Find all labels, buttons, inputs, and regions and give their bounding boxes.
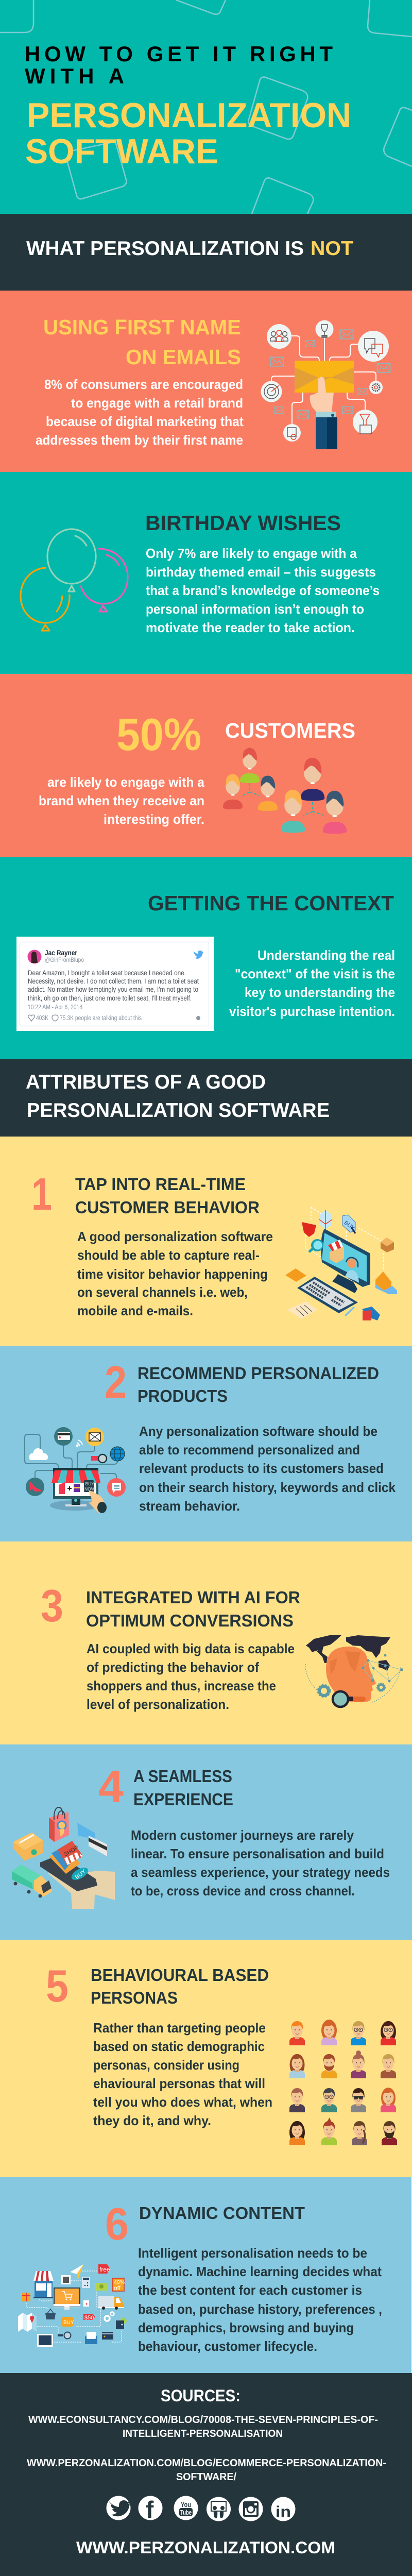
text: understanding context: visitor's purchase intention. [229, 1004, 395, 1019]
text: first name statistic: because of digital marketing that [46, 414, 244, 429]
icon: gift [22, 2293, 30, 2301]
heading: tap into real-time customer behavior [75, 1175, 260, 1217]
icon: basket [302, 1222, 316, 1237]
icon: wallet [285, 1268, 306, 1282]
icon: map [18, 2313, 37, 2332]
icon: customer network [223, 748, 347, 834]
text: recommendations: Any personalization software should be [139, 1423, 377, 1439]
text: birthday statistic: that a brand’s knowledge of someone’s [146, 583, 380, 598]
text: intelligent personalisation: the best content for each customer is [138, 2282, 362, 2298]
icon: pointing hand [89, 1490, 107, 1514]
icon: wifi [76, 1440, 82, 1447]
heading: tap into real-time customer behavior: TAP INTO REAL-TIME [75, 1175, 246, 1194]
heading: dynamic content: DYNAMIC CONTENT [139, 2204, 305, 2223]
heading: behavioural based personas: PERSONAS [91, 1989, 178, 2008]
number: 6: 6 [105, 2198, 129, 2249]
heading: integrated with AI: OPTIMUM CONVERSIONS [86, 1612, 294, 1631]
screenshot: tweet card: 75.3K people are talking about this [60, 1014, 142, 1022]
heading: using first name: ON EMAILS [126, 345, 241, 369]
heading: recommend personalized products [138, 1364, 379, 1406]
icon: twitter [106, 2496, 131, 2520]
icon: facebook [138, 2496, 163, 2523]
heading: what personalization is not: WHAT PERSONALIZATION IS [26, 238, 304, 260]
icon: buy button: BUY [343, 1220, 356, 1232]
screenshot: tweet card: 10:22 AM - Apr 6, 2018 [28, 1003, 82, 1011]
icon: buy button [342, 1215, 356, 1233]
text: source links [27, 2414, 386, 2483]
title: personalization software: SOFTWARE [25, 132, 218, 171]
text: first name statistic: to engage with a retail brand [71, 395, 243, 411]
panel: using first name on emails [0, 291, 412, 472]
icon: pen [345, 1307, 354, 1316]
icon: free tag [98, 2264, 110, 2274]
icon: youtube [174, 2496, 198, 2520]
text: recommendations: able to recommend personalized and [139, 1442, 360, 1458]
icon: parcel [381, 1238, 394, 1252]
text: behavioural personas: they do it, and why. [93, 2113, 211, 2128]
text: intelligent personalisation: demographics, browsing and buying [138, 2320, 354, 2335]
icon: buy button: BUY [74, 1868, 88, 1880]
heading: attributes of a good personalization software: PERSONALIZATION SOFTWARE [27, 1099, 330, 1122]
panel: attribute 5 behavioural personas [0, 1940, 412, 2177]
heading: using first name: USING FIRST NAME [43, 315, 241, 339]
heading: getting the context: GETTING THE CONTEXT [148, 891, 394, 915]
icon: magnifier [91, 1454, 107, 1463]
button: buy now [84, 1480, 95, 1492]
text: customer journeys [131, 1827, 390, 1899]
text: understanding context: "context" of the visit is the [235, 966, 395, 981]
heading: behavioural based personas [91, 1966, 269, 2008]
icon: wallet [116, 2317, 127, 2329]
text: behavioural personas [93, 2020, 272, 2128]
icon: truck [375, 1272, 397, 1294]
icon: paper plane [70, 2264, 83, 2279]
text: recommendations [139, 1423, 396, 1514]
icon: buy tag: BUY [63, 2320, 74, 2326]
icon: 40% off: 40% [114, 2279, 125, 2285]
panel: birthday wishes [0, 472, 412, 674]
text: interesting offer: brand when they receive an [39, 793, 204, 808]
icon: balloons [21, 529, 128, 631]
heading: tap into real-time customer behavior: CUSTOMER BEHAVIOR [75, 1198, 260, 1217]
panel: attribute 6 dynamic content [0, 2177, 412, 2373]
icon: free tag: free [99, 2266, 110, 2273]
text: AI and big data: AI coupled with big data is capable [87, 1641, 295, 1656]
icon: credit card [102, 2332, 113, 2340]
text: customer journeys: Modern customer journeys are rarely [131, 1827, 354, 1843]
icon: calculator [82, 2277, 90, 2288]
icon: note [287, 1301, 317, 1319]
button: buy now: BUY [85, 1481, 94, 1486]
panel: getting the context [0, 857, 412, 1059]
text: tweet body: Dear Amazon, I bought a toilet seat because I needed one. [28, 969, 186, 977]
text: real-time behavior: time visitor behavior happening [77, 1266, 268, 1282]
icon: heart and reply [28, 1015, 58, 1021]
panel: title header [0, 0, 412, 214]
text: intelligent personalisation: behaviour, customer lifecycle. [138, 2338, 317, 2354]
text: first name statistic [36, 377, 244, 448]
heading: integrated with AI: INTEGRATED WITH AI FOR [86, 1588, 300, 1607]
heading: a seamless experience: A SEAMLESS [133, 1767, 232, 1786]
panel: 50% customers [0, 674, 412, 857]
text: first name statistic: 8% of consumers are encouraged [44, 377, 243, 392]
heading: a seamless experience: EXPERIENCE [133, 1790, 233, 1809]
text: behavioural personas: personas, consider using [93, 2057, 239, 2073]
icon: facebook: f [146, 2496, 154, 2523]
text: intelligent personalisation: based on, purchase history, preferences , [138, 2301, 382, 2317]
icon: mail bubble [85, 1428, 104, 1446]
text: website: WWW.PERZONALIZATION.COM [76, 2538, 335, 2557]
text: birthday statistic: motivate the reader to take action. [146, 620, 355, 635]
text: real-time behavior: mobile and e-mails. [77, 1303, 193, 1318]
text: understanding context: key to understanding the [245, 985, 395, 1000]
text: behavioural personas: Rather than targeting people [93, 2020, 266, 2036]
screenshot: tweet card: 403K [36, 1014, 48, 1022]
text: tweet body: addict. No matter how temptingly you email me, I'm not going to [28, 986, 198, 993]
text: source links: WWW.ECONSULTANCY.COM/BLOG/70008-THE-SEVEN-PRINCIPLES-OF- [28, 2414, 378, 2426]
icon: box [13, 1833, 43, 1861]
panel: attribute 3 integrated with AI [0, 1541, 412, 1744]
text: intelligent personalisation: Intelligent personalisation needs to be [138, 2245, 367, 2261]
heading: sources: SOURCES: [161, 2386, 241, 2405]
icon: gears [105, 2312, 114, 2321]
text: real-time behavior [77, 1229, 273, 1318]
number: 3: 3 [41, 1580, 63, 1631]
panel: footer sources [0, 2373, 412, 2576]
icon: delivery truck [12, 1865, 52, 1898]
icon: basket [45, 2309, 56, 2319]
icon: buy button [70, 1865, 90, 1883]
icon: hand [47, 1871, 115, 1909]
icon: e-commerce flow illustration [18, 2264, 127, 2347]
icon: 40% off [112, 2278, 125, 2292]
icon: avatar [28, 950, 41, 963]
icon: $50 tag: $50 [84, 2315, 94, 2321]
icon: mobile shopping illustration [12, 1807, 115, 1909]
icon: persona avatar grid [289, 2020, 397, 2145]
icon: magnifier [58, 2332, 71, 2339]
icon: 40% off: off [114, 2284, 121, 2292]
icon: chat bubble [107, 1478, 126, 1497]
text: birthday statistic: Only 7% are likely to engage with a [146, 546, 357, 561]
title: personalization software [25, 96, 351, 171]
heading: behavioural based personas: BEHAVIOURAL BASED [91, 1966, 269, 1985]
title: personalization software: PERSONALIZATION [27, 96, 351, 135]
icon: phone shop [49, 1841, 83, 1874]
text: first name statistic: addresses them by their first name [36, 432, 243, 448]
heading: integrated with AI [86, 1588, 300, 1631]
icon: buy tag [61, 2317, 74, 2327]
screenshot: tweet card: @GirlFromBlupo [45, 956, 84, 963]
number: 1: 1 [31, 1168, 52, 1219]
icon: $50 tag [83, 2314, 95, 2321]
icon: instagram [239, 2497, 263, 2521]
icon: shopping bag [49, 1807, 69, 1842]
icon: globe [110, 1447, 125, 1461]
text: real-time behavior: should be able to capture real- [77, 1247, 260, 1263]
panel: what personalization is not [0, 214, 412, 291]
stat: 50%: 50% [116, 709, 201, 760]
screenshot: tweet card [16, 937, 214, 1031]
icon: mug [83, 2300, 89, 2307]
icon: shoe bubble [26, 1478, 44, 1496]
number: 2: 2 [105, 1357, 127, 1408]
text: interesting offer [39, 774, 204, 827]
text: intelligent personalisation: dynamic. Machine learning decides what [138, 2264, 382, 2279]
heading: recommend personalized products: RECOMMEND PERSONALIZED [138, 1364, 379, 1383]
title: how to get it right: HOW TO GET IT RIGHT [25, 42, 333, 66]
text: behavioural personas: based on static demographic [93, 2039, 265, 2054]
text: tweet body [28, 969, 199, 1002]
text: real-time behavior: on several channels i.e. web, [77, 1284, 248, 1300]
text: understanding context: Understanding the real [258, 947, 395, 963]
icon: open mail [85, 2332, 97, 2344]
text: customer journeys: to be, cross device and cross channel. [131, 1883, 355, 1899]
icon: delivery truck [98, 2296, 124, 2310]
icon: linkedin [271, 2497, 296, 2521]
button: buy now: NOW [84, 1486, 95, 1492]
text: customer journeys: linear. To ensure personalisation and build [131, 1846, 384, 1861]
text: AI and big data: shoppers and thus, increase the [87, 1678, 276, 1693]
text: AI and big data: of predicting the behavior of [87, 1659, 259, 1675]
text: source links: INTELLIGENT-PERSONALISATION [123, 2428, 283, 2439]
icon: cash [95, 2283, 108, 2291]
heading: using first name [43, 315, 241, 369]
icon: AI head with world map [305, 1635, 403, 1707]
heading: attributes of a good personalization software: ATTRIBUTES OF A GOOD [26, 1071, 266, 1093]
text: tweet body: think, oh go on then, just one more toilet seat, I'll treat myself. [28, 994, 192, 1002]
icon: gift [319, 1210, 332, 1229]
number: 5: 5 [46, 1960, 68, 2011]
heading: a seamless experience [133, 1767, 233, 1809]
icon: phone [40, 1855, 97, 1891]
screenshot: tweet card: Jac Rayner [45, 949, 78, 957]
panel: attribute 4 seamless experience [0, 1744, 412, 1940]
text: birthday statistic: birthday themed email – this suggests [146, 564, 376, 580]
text: intelligent personalisation [138, 2245, 382, 2354]
icon: credit card [362, 1307, 380, 1320]
icon: phone shop: SHOP [63, 1844, 80, 1858]
text: AI and big data [87, 1641, 295, 1712]
text: source links: WWW.PERZONALIZATION.COM/BLOG/ECOMMERCE-PERSONALIZATION- [27, 2458, 386, 2469]
icon: isometric computer store [285, 1207, 397, 1320]
number: 4: 4 [98, 1761, 124, 1812]
icon: online store hub [25, 1427, 126, 1514]
panel: attribute 1 real-time behavior [0, 1137, 412, 1346]
text: understanding context [229, 947, 395, 1019]
icon: monitor with cart [54, 2287, 80, 2310]
text: recommendations: relevant products to its customers based [139, 1461, 384, 1476]
text: recommendations: on their search history, keywords and click [139, 1480, 396, 1495]
icon: barcode [61, 2275, 71, 2284]
title: how to get it right: WITH A [25, 64, 124, 88]
heading: what personalization is not: NOT [311, 238, 353, 260]
title: how to get it right [25, 42, 333, 88]
heading: birthday wishes: BIRTHDAY WISHES [145, 511, 341, 535]
panel: attribute 2 recommend products [0, 1346, 412, 1541]
icon: cloud [29, 1448, 48, 1460]
text: AI and big data: level of personalization. [87, 1697, 229, 1712]
icon: store [33, 2271, 54, 2298]
text: interesting offer: are likely to engage with a [47, 774, 204, 790]
heading: recommend personalized products: PRODUCTS [138, 1387, 228, 1406]
text: customer journeys: a seamless experience, your strategy needs [131, 1865, 390, 1880]
text: birthday statistic: personal information isn’t enough to [146, 601, 364, 617]
text: recommendations: stream behavior. [139, 1498, 240, 1514]
text: behavioural personas: ehavioural personas that will [93, 2076, 265, 2091]
heading: customers: CUSTOMERS [225, 719, 355, 742]
icon: email hub illustration [261, 320, 390, 449]
icon: twitter bird [194, 951, 203, 959]
icon: card bubble [54, 1427, 73, 1446]
text: source links: SOFTWARE/ [176, 2471, 236, 2483]
icon: slideshare [207, 2497, 231, 2521]
text: birthday statistic [146, 546, 380, 635]
icon: linkedin: in [276, 2503, 291, 2520]
panel: attributes heading [0, 1059, 412, 1137]
text: behavioural personas: tell you who does what, when [93, 2094, 272, 2110]
text: tweet body: Necessity, not desire. I do not collect them. I am not a toilet seat [28, 977, 199, 985]
text: interesting offer: interesting offer. [104, 811, 204, 827]
icon: youtube: Tube [180, 2509, 192, 2516]
icon: youtube: You [181, 2500, 191, 2509]
heading: attributes of a good personalization software [26, 1071, 330, 1122]
icon: tablet [37, 2334, 53, 2347]
icon: credit cards [77, 1823, 107, 1856]
text: real-time behavior: A good personalization software [77, 1229, 273, 1244]
